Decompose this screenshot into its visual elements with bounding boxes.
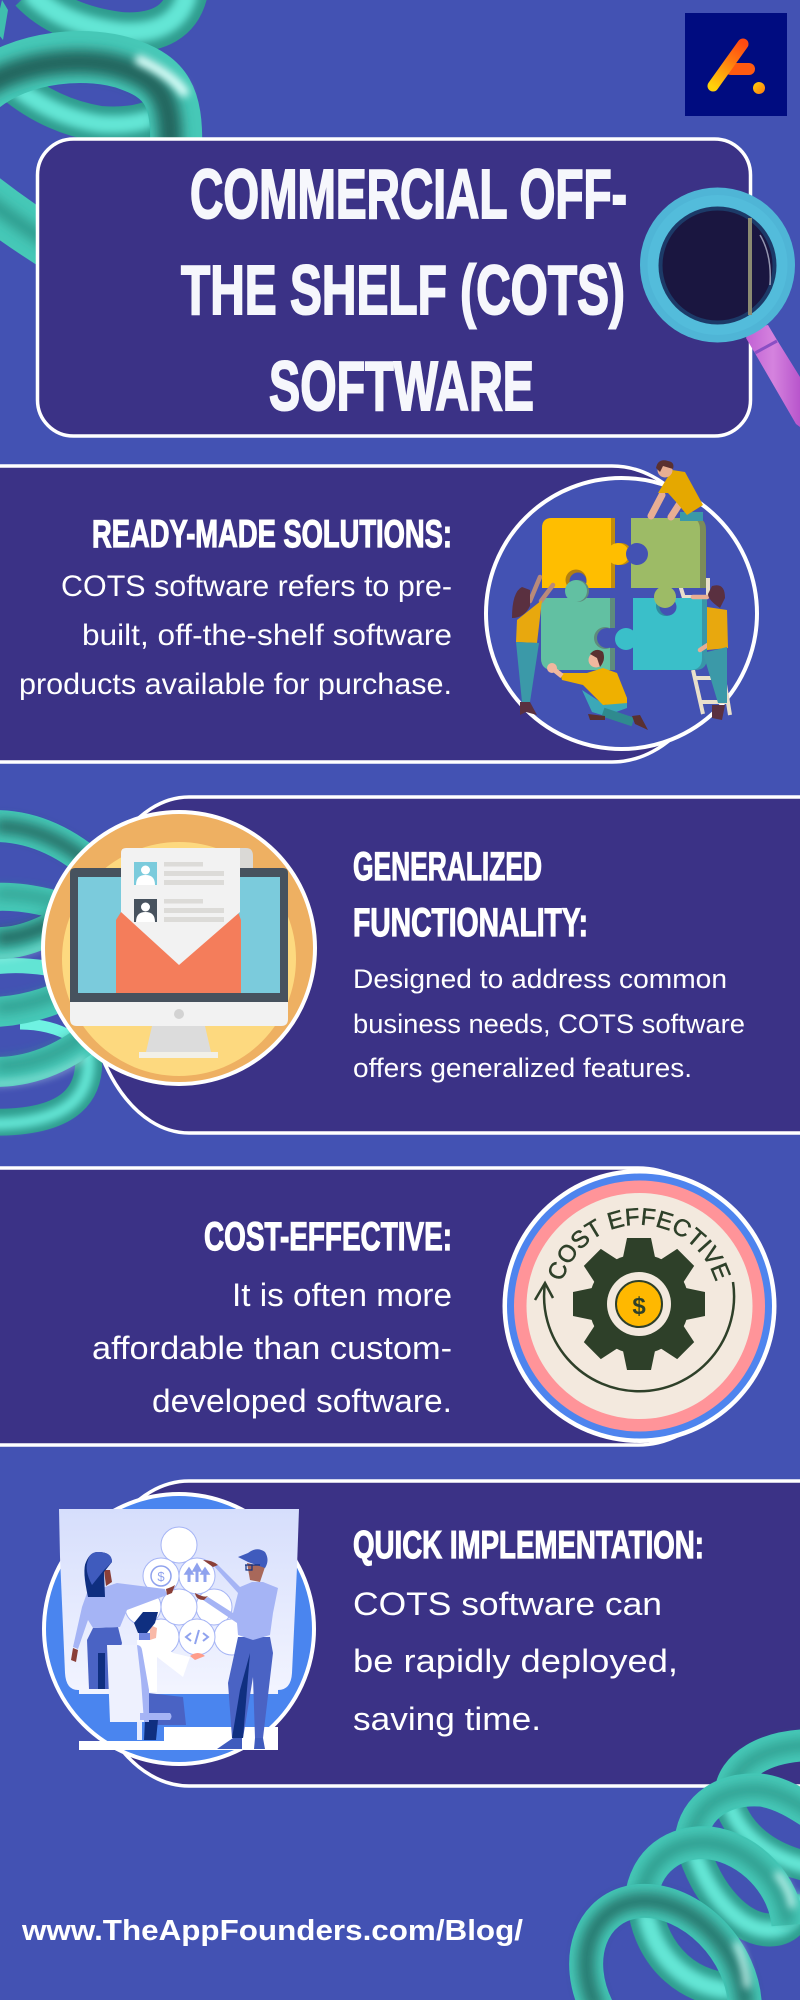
panel: generalized functionality <box>43 797 800 1133</box>
monitor stand <box>146 1026 211 1052</box>
steps <box>79 1727 278 1750</box>
website url: www.TheAppFounders.com/Blog/ <box>21 1915 523 1947</box>
body text: ready-made solutions: built, off-the-shelf software <box>82 619 452 652</box>
logo <box>685 13 787 116</box>
chair <box>107 1645 149 1722</box>
puzzle: cyan <box>615 586 707 670</box>
dollar sign: $ <box>632 1293 646 1320</box>
panel: quick implementation <box>44 1481 800 1786</box>
heading: ready-made solutions: READY-MADE SOLUTIONS: <box>92 513 452 556</box>
person: right woman <box>693 585 728 720</box>
person: left woman <box>512 577 553 715</box>
heading: generalized functionality <box>353 845 588 945</box>
person: woman <box>71 1552 175 1689</box>
panel: cost-effective <box>0 1166 776 1447</box>
circle symbols <box>151 1564 209 1644</box>
body text: generalized functionality <box>353 964 745 1083</box>
person: seated man <box>107 1612 205 1740</box>
gear <box>573 1238 705 1370</box>
body text: cost-effective: developed software. <box>152 1383 452 1419</box>
decorative coil: middle left <box>0 826 100 1124</box>
whiteboard <box>59 1509 299 1690</box>
body text: quick implementation <box>353 1586 678 1737</box>
badge arrow <box>535 1282 734 1391</box>
body text: quick implementation: be rapidly deployed, <box>353 1643 678 1679</box>
heading: generalized functionality: FUNCTIONALITY: <box>353 901 588 945</box>
body text: generalized functionality: Designed to address common <box>353 964 727 994</box>
title panel <box>38 139 750 436</box>
heading: cost-effective: COST-EFFECTIVE: <box>204 1215 452 1259</box>
icon: email on monitor <box>43 812 315 1084</box>
body text: ready-made solutions <box>19 570 452 701</box>
body text: generalized functionality: business needs, COTS software <box>353 1009 745 1039</box>
body text: generalized functionality: offers generalized features. <box>353 1053 692 1083</box>
badge curved text: COST EFFECTIVE <box>548 1208 731 1282</box>
badge: cost effective gear <box>502 1170 776 1443</box>
body text: cost-effective: It is often more <box>232 1277 452 1313</box>
person: squatting man <box>547 650 648 730</box>
puzzle: yellow <box>542 518 632 590</box>
monitor <box>70 868 288 1026</box>
panel: ready-made solutions <box>0 460 757 762</box>
body text: cost-effective: affordable than custom- <box>92 1330 452 1366</box>
icon: team at whiteboard <box>44 1494 314 1764</box>
decorative coil: bottom right <box>586 1745 800 2000</box>
body text: ready-made solutions: COTS software refers to pre- <box>61 570 452 603</box>
person: top <box>651 460 703 521</box>
icon: puzzle team <box>486 460 757 749</box>
body text: cost-effective <box>92 1277 452 1419</box>
icon: magnifying glass <box>640 188 800 427</box>
puzzle: mint <box>541 580 617 670</box>
decorative coil: top left <box>0 0 188 250</box>
envelope and letter <box>116 848 253 993</box>
circle grid <box>125 1527 250 1655</box>
ladder <box>680 578 730 715</box>
title text: SOFTWARE <box>269 347 534 425</box>
title text <box>181 155 627 425</box>
puzzle: green <box>626 518 706 588</box>
person: man standing <box>195 1549 278 1749</box>
body text: quick implementation: saving time. <box>353 1701 541 1737</box>
body text: ready-made solutions: products available for purchase. <box>19 668 452 701</box>
body text: quick implementation: COTS software can <box>353 1586 662 1622</box>
circle symbols: $ <box>157 1569 165 1584</box>
heading: generalized functionality: GENERALIZED <box>353 845 542 889</box>
